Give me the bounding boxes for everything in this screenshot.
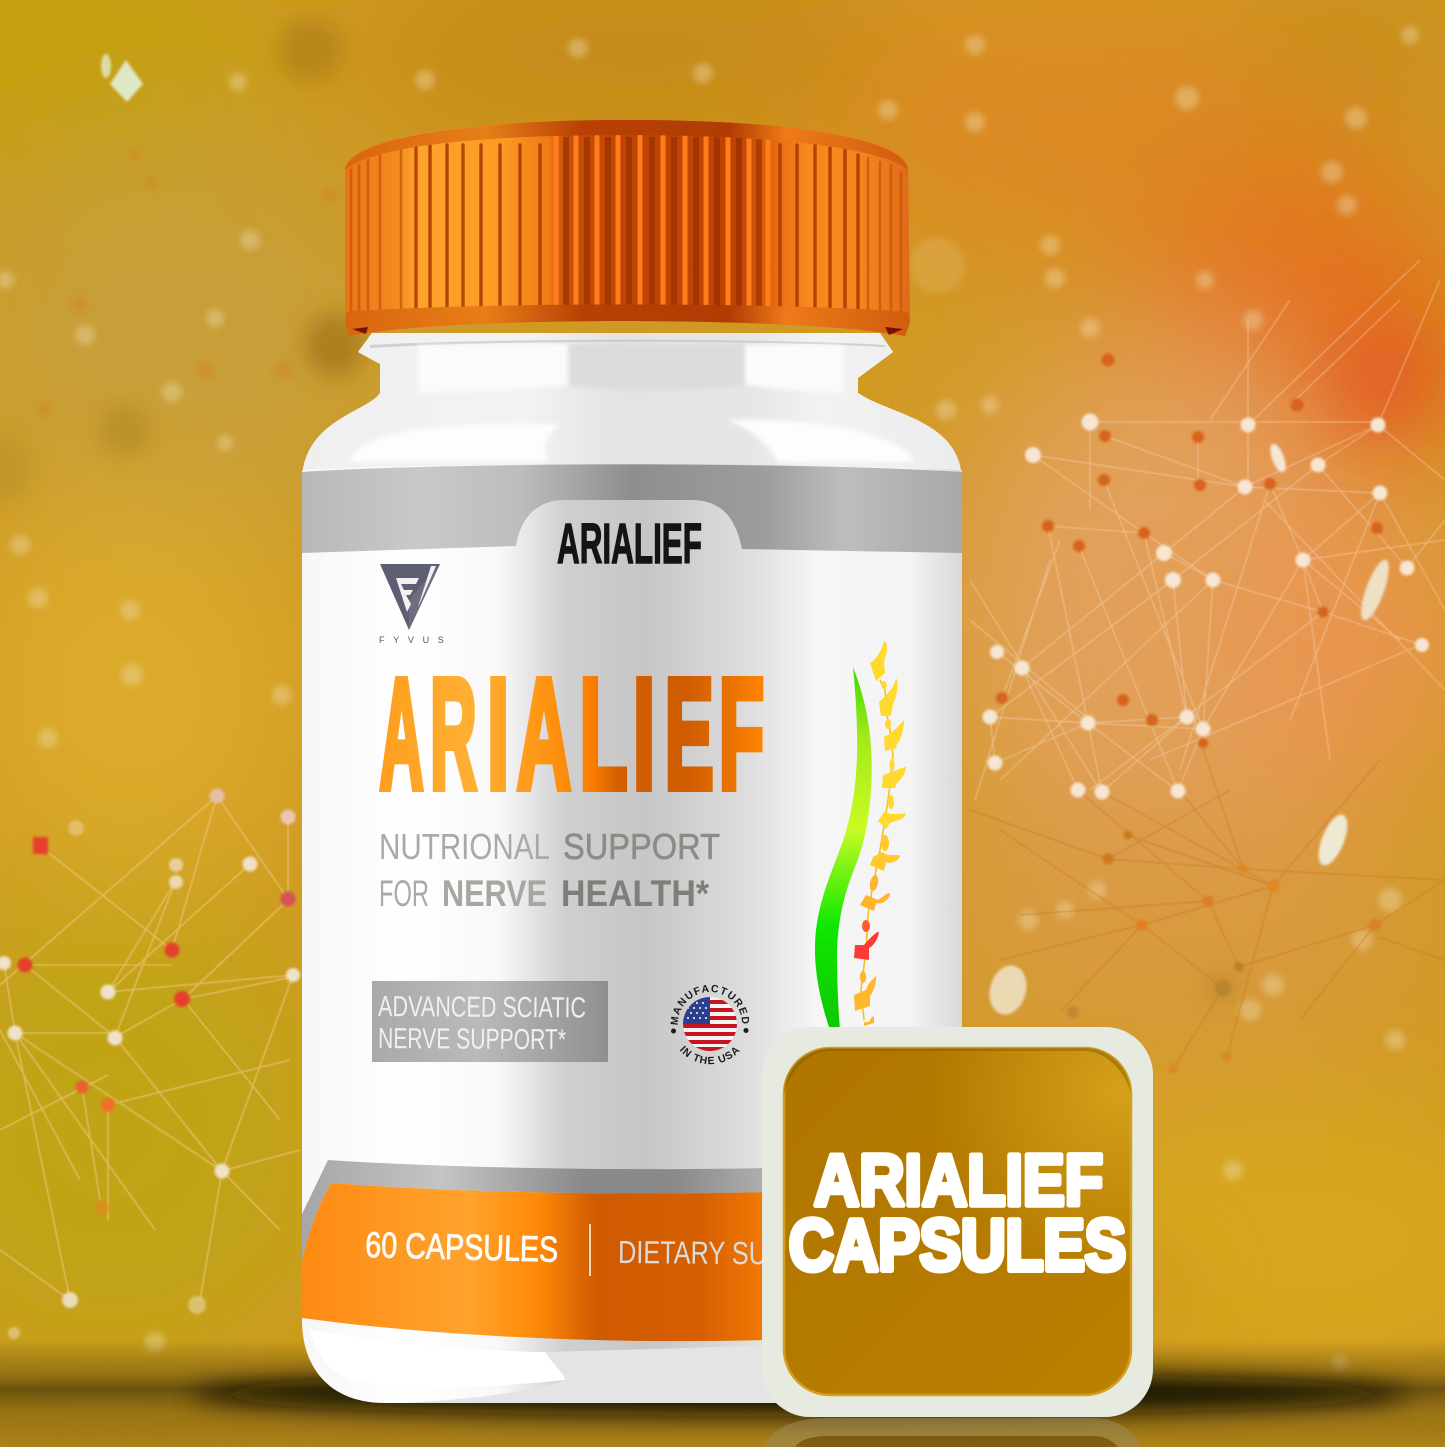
spine illustration (815, 641, 906, 1030)
sciatic nerve support box: NERVE SUPPORT* (378, 1023, 566, 1056)
cap inner dark notches (352, 327, 903, 335)
lower grey band (302, 1160, 770, 1262)
dietary supplement text: DIETARY SUPPLEMENT (618, 1234, 903, 1272)
bottom shaded glass (400, 1345, 770, 1403)
subtitle line one: NUTRIONAL (379, 826, 550, 867)
small product name: ARIALIEF (557, 512, 702, 576)
grey top band (302, 464, 962, 553)
main product title: I (487, 647, 509, 822)
main product title: A (380, 647, 424, 822)
subtitle line one (379, 826, 720, 867)
main product title: L (580, 647, 628, 822)
bottle body (302, 333, 962, 1403)
seal dots (671, 1028, 748, 1034)
network: left side lines and nodes (0, 788, 300, 1339)
logo mark (380, 564, 440, 630)
seal text bottom: IN THE USA (680, 1046, 740, 1064)
cap ribs: bright ribs in shaded centre (556, 137, 768, 308)
floor shadow band (0, 1340, 1445, 1447)
orange label band (302, 1183, 770, 1341)
logo wordmark: FYVUS (379, 635, 453, 645)
network: right side lines (970, 260, 1445, 800)
capsule count: 60 CAPSULES (365, 1224, 559, 1270)
band divider (589, 1224, 591, 1276)
cap ribs: dark grooves on the lit sides (416, 145, 858, 312)
subtitle line one: SUPPORT (563, 826, 720, 867)
cap lower rim (345, 304, 910, 336)
brand logo FYVUS (379, 564, 453, 645)
vertebrae (854, 641, 906, 1026)
subtitle line two: FOR (379, 873, 429, 914)
network: right side nodes (982, 354, 1429, 1074)
background: orange blurred spots (39, 149, 337, 416)
main product title: I (633, 647, 655, 822)
sciatic nerve support box: ADVANCED SCIATIC (378, 991, 586, 1024)
badge outer frame (762, 1027, 1153, 1417)
badge title line one: ARIALIEF (814, 1141, 1103, 1221)
reflection of badge on floor (765, 1418, 1140, 1447)
cap ribs: faint outer grooves (351, 150, 901, 318)
badge inner panel (784, 1048, 1131, 1395)
seal text top: MANUFACTURED (670, 984, 749, 1025)
subtitle line two (379, 873, 710, 914)
text: F (719, 647, 764, 822)
main product title: R (430, 647, 477, 822)
green nerve curve (815, 667, 872, 1030)
background: white fleck top left (101, 54, 143, 102)
american flag circle (683, 997, 737, 1051)
main product title (380, 647, 764, 822)
bottom highlight (310, 1330, 565, 1387)
badge: Arialief Capsules (762, 1027, 1153, 1417)
subtitle line two: NERVE (442, 873, 547, 914)
background: pale elongated flecks (984, 557, 1394, 1019)
manufactured in the USA seal (670, 984, 749, 1064)
network: lower right orange lines (970, 740, 1445, 1069)
subtitle line two: HEALTH* (561, 873, 710, 914)
bottle (302, 333, 962, 1403)
badge title line two: CAPSULES (789, 1206, 1126, 1286)
cap top rim (345, 120, 908, 170)
main product title: E (665, 647, 714, 822)
bottle neck and shoulder (302, 333, 962, 482)
sciatic nerve support box (372, 981, 608, 1062)
cap ribs: shaded gaps between bright ribs (566, 137, 759, 310)
orange ribbed cap (345, 120, 910, 336)
main product title: A (517, 647, 571, 822)
